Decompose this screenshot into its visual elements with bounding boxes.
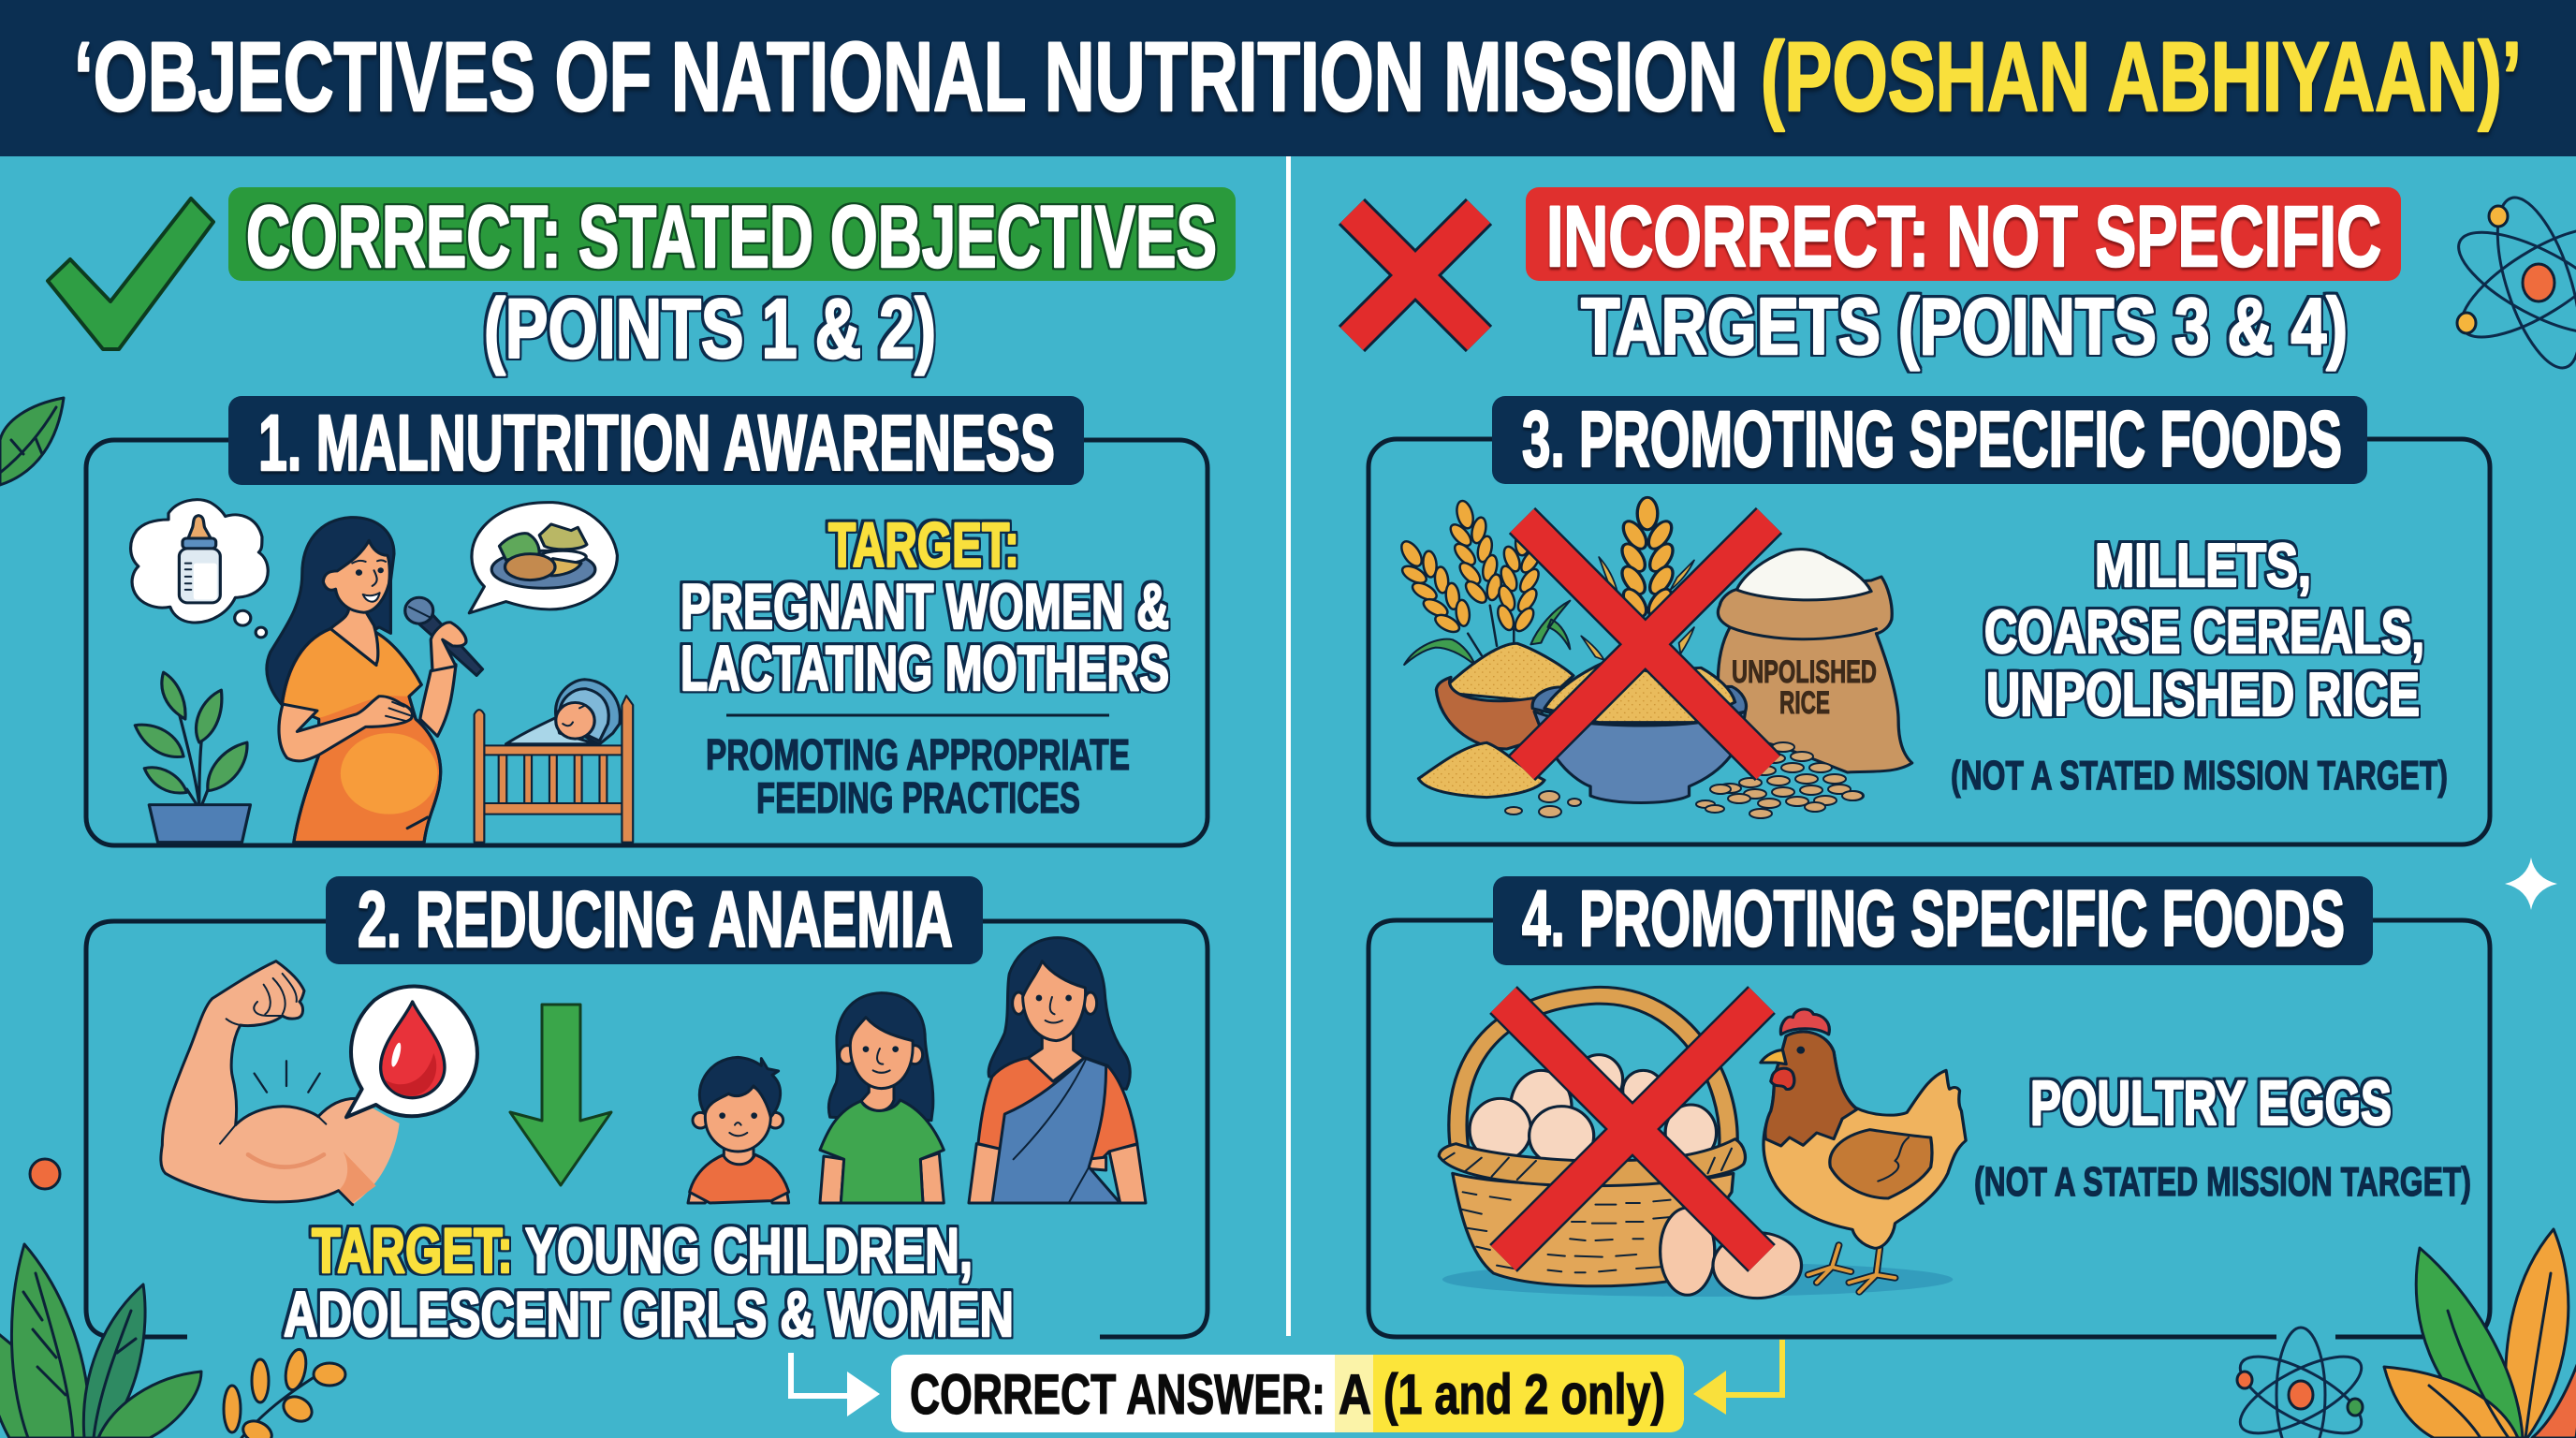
panel 4 text [1974, 1068, 2471, 1205]
panel 4: promoting specific foods, eggs [1368, 874, 2490, 1337]
icon: flexed arm [161, 961, 400, 1205]
panel 2 target text [284, 1215, 1014, 1350]
title banner: ‘OBJECTIVES OF NATIONAL NUTRITION MISSION [74, 22, 1738, 132]
decoration: leaf top left [0, 398, 64, 485]
heading: correct stated objectives: CORRECT: STATED OBJECTIVES [246, 187, 1217, 286]
illustration: grains, bowls and rice sack: RICE [1779, 685, 1830, 721]
illustration: flexed arm and blood drop [161, 961, 477, 1205]
subheading: points 1 and 2: (POINTS 1 & 2) [484, 283, 936, 376]
panel 3 text: COARSE CEREALS, [1984, 597, 2424, 666]
title banner [0, 0, 2576, 156]
arrow: green down arrow [510, 1005, 611, 1185]
panel 3 text: UNPOLISHED RICE [1986, 660, 2420, 728]
illustration: basket of eggs and hen [1439, 995, 1966, 1299]
panel 1 heading: 1. MALNUTRITION AWARENESS [258, 399, 1055, 487]
panel 1 target text: LACTATING MOTHERS [681, 633, 1169, 704]
decoration: bottom left leaves [0, 1244, 201, 1438]
illustration: hen [1761, 1009, 1966, 1292]
correct answer bar: (1 and 2 only) [1383, 1363, 1665, 1426]
icon: red cross over basket [1503, 1000, 1762, 1258]
correct answer bar: CORRECT ANSWER: [910, 1363, 1325, 1426]
decoration: bottom right atom [2230, 1328, 2372, 1438]
icon: speech bubble with food plate [469, 503, 617, 613]
icon: thought bubble with baby bottle [131, 500, 268, 638]
panel 1 target text [681, 510, 1169, 822]
correct answer bar [891, 1355, 1684, 1432]
illustration: grains, bowls and rice sack: UNPOLISHED [1732, 654, 1877, 690]
illustration: pregnant woman with microphone [267, 518, 483, 843]
arrow: white arrow to answer [791, 1353, 880, 1416]
decoration: orange sprig [224, 1347, 345, 1438]
illustration: woman in saree [969, 938, 1146, 1203]
illustration: basket [1439, 995, 1802, 1299]
heading: correct stated objectives [228, 187, 1236, 286]
arrow: yellow arrow to answer [1693, 1340, 1782, 1415]
panel 2 target text: TARGET: [312, 1215, 513, 1286]
decoration: bottom right leaves [2384, 1229, 2576, 1438]
panel 1 heading [228, 396, 1084, 487]
panel 2: reducing anaemia [86, 875, 1208, 1350]
panel 1 target text: TARGET: [828, 510, 1019, 580]
illustration: panel 1 scene [131, 500, 633, 843]
panel 2 target text: YOUNG CHILDREN, [525, 1215, 973, 1286]
panel 1: malnutrition awareness [86, 396, 1208, 845]
illustration: grains, bowls and rice sack [1385, 495, 1912, 818]
illustration: children and woman [688, 938, 1146, 1203]
panel 1 target text: FEEDING PRACTICES [756, 773, 1080, 822]
subheading: targets points 3 and 4: TARGETS (POINTS 3 & 4) [1581, 283, 2348, 372]
panel 4 text: POULTRY EGGS [2030, 1068, 2392, 1138]
icon: red cross [1352, 212, 1479, 339]
panel 2 heading: 2. REDUCING ANAEMIA [358, 875, 953, 963]
decoration: top right atom [2445, 188, 2576, 377]
decoration: white star [2505, 858, 2557, 910]
panel 3: promoting specific foods, grains [1368, 395, 2490, 844]
panel 3 text [1951, 531, 2448, 799]
panel 1 target text: PREGNANT WOMEN & [681, 571, 1169, 642]
illustration: adolescent girl [820, 993, 944, 1203]
illustration: young boy [688, 1057, 789, 1203]
illustration: potted plant [135, 672, 250, 843]
central divider [1286, 156, 1291, 1336]
panel 1 target text: PROMOTING APPROPRIATE [706, 730, 1130, 779]
panel 2 target text: ADOLESCENT GIRLS & WOMEN [284, 1279, 1014, 1350]
icon: red cross over grains [1522, 521, 1769, 768]
decoration: orange dot [30, 1159, 60, 1189]
icon: blood drop speech bubble [346, 987, 477, 1117]
correct answer bar: A [1339, 1363, 1371, 1426]
right column heading [1352, 187, 2401, 372]
left column heading [48, 187, 1236, 376]
panel 2 heading [326, 875, 983, 964]
icon: green check mark [48, 198, 213, 349]
illustration: baby in crib [475, 680, 633, 843]
panel 3 text: MILLETS, [2095, 531, 2311, 599]
